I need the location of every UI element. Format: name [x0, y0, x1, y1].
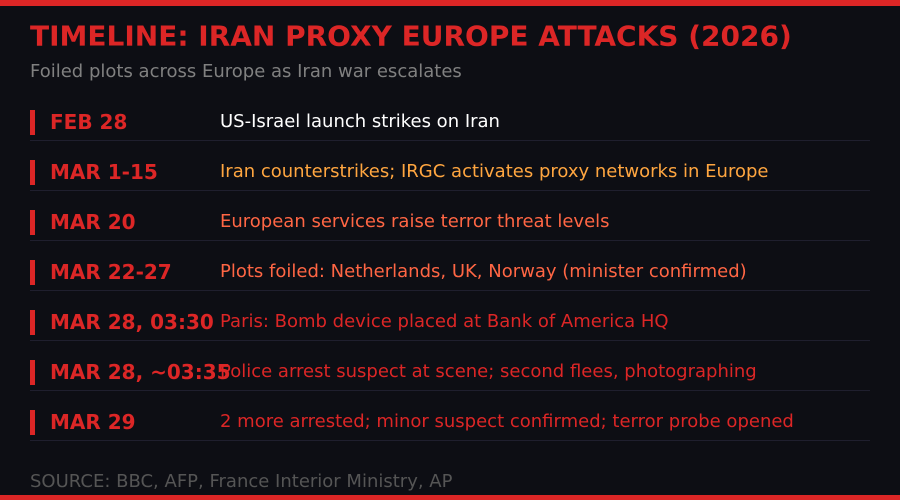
- timeline row: Mar 22-27: Plots foiled: Netherlands, UK, Norway (minister confirmed): [220, 261, 747, 282]
- timeline row: Mar 28 ~03:35: MAR 28, ~03:35: [50, 360, 231, 384]
- subtitle: Foiled plots across Europe as Iran war escalates: [30, 61, 462, 82]
- timeline row: Mar 1-15: Iran counterstrikes; IRGC activates proxy networks in Europe: [220, 161, 768, 182]
- bottom accent bar: [0, 495, 900, 500]
- timeline row: Mar 28 ~03:35: [30, 360, 870, 391]
- timeline row: Mar 20: European services raise terror threat levels: [220, 211, 610, 232]
- timeline row: Mar 28 03:30: MAR 28, 03:30: [50, 310, 214, 334]
- timeline row: Feb 28: FEB 28: [50, 110, 127, 134]
- timeline row: Mar 28 ~03:35: Police arrest suspect at scene; second flees, photographing: [220, 361, 757, 382]
- timeline row: Mar 22-27: [30, 260, 870, 291]
- timeline row: Mar 28 03:30: Paris: Bomb device placed at Bank of America HQ: [220, 311, 669, 332]
- timeline row: Mar 28 03:30: [30, 310, 870, 341]
- top accent bar: [0, 0, 900, 6]
- timeline row: Mar 29: MAR 29: [50, 410, 136, 434]
- timeline row: Mar 20: [30, 210, 870, 241]
- source line: SOURCE: BBC, AFP, France Interior Ministry, AP: [30, 471, 453, 492]
- timeline row: Mar 20: MAR 20: [50, 210, 136, 234]
- timeline row: Mar 29: [30, 410, 870, 441]
- timeline row: Feb 28: [30, 110, 870, 141]
- timeline row: Mar 1-15: [30, 160, 870, 191]
- timeline row: Mar 22-27: MAR 22-27: [50, 260, 172, 284]
- timeline row: Mar 29: 2 more arrested; minor suspect confirmed; terror probe opened: [220, 411, 794, 432]
- title: TIMELINE: IRAN PROXY EUROPE ATTACKS (2026): [30, 20, 792, 53]
- timeline row: Mar 1-15: MAR 1-15: [50, 160, 158, 184]
- timeline row: Feb 28: US-Israel launch strikes on Iran: [220, 111, 500, 132]
